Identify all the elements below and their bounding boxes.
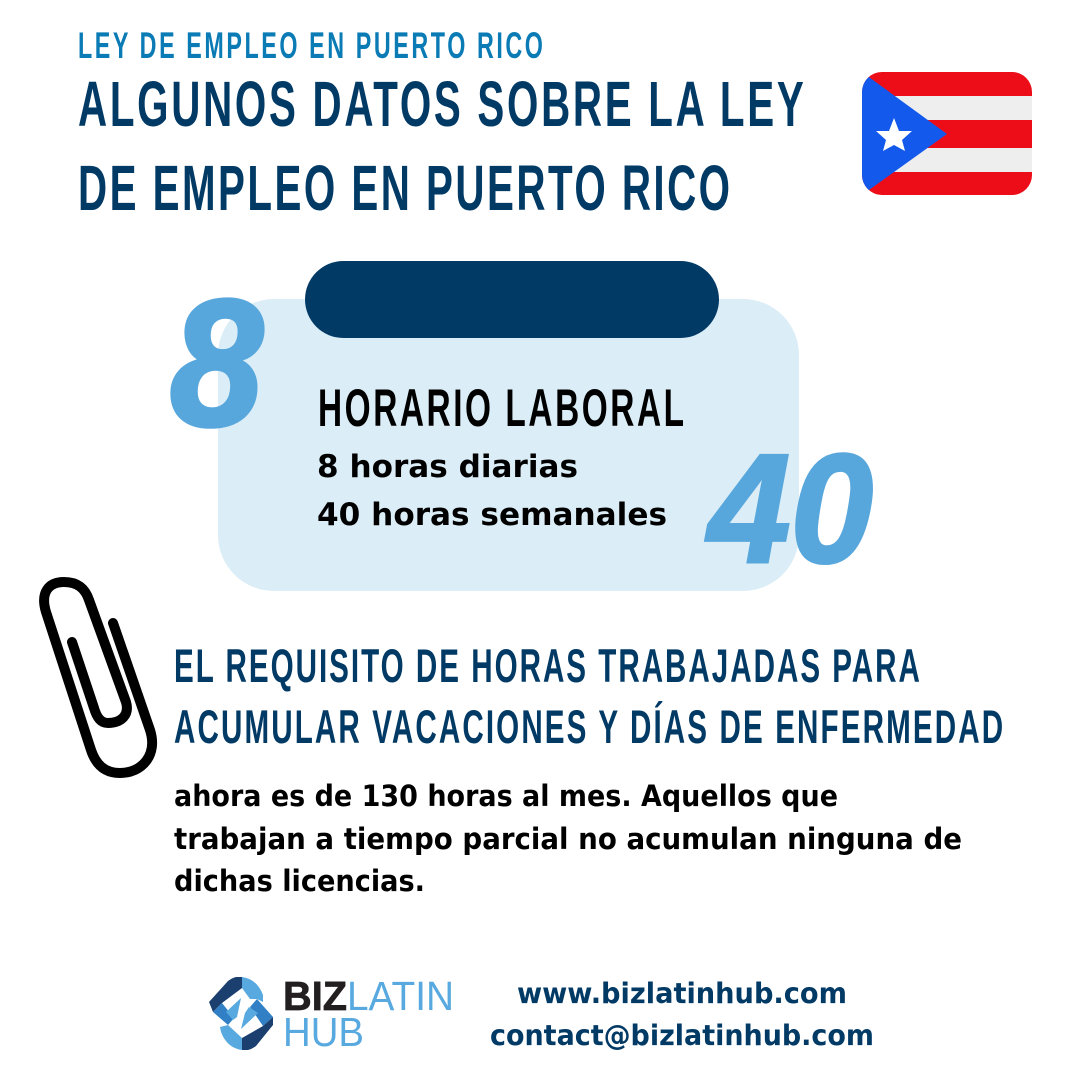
body paragraph: ahora es de 130 horas al mes. Aquellos que (174, 779, 838, 813)
body paragraph: dichas licencias. (174, 864, 425, 898)
eyebrow heading: LEY DE EMPLEO EN PUERTO RICO (78, 24, 543, 66)
contact details: contact@bizlatinhub.com (490, 1019, 874, 1052)
section heading: ACUMULAR VACACIONES Y DÍAS DE ENFERMEDAD (174, 701, 1003, 754)
contact details (490, 977, 874, 1052)
logo wordmark: BIZ (283, 973, 347, 1019)
logo mark (209, 977, 273, 1050)
number 40: 40 (705, 422, 873, 595)
body paragraph (174, 779, 962, 898)
body paragraph: trabajan a tiempo parcial no acumulan ninguna de (174, 822, 962, 856)
panel body text: 8 horas diarias (317, 449, 578, 485)
title: DE EMPLEO EN PUERTO RICO (78, 154, 730, 224)
number 8: 8 (170, 263, 263, 464)
title: ALGUNOS DATOS SOBRE LA LEY (78, 70, 804, 140)
panel body text: 40 horas semanales (317, 497, 667, 533)
logo: Biz Latin Hub: LATIN (347, 973, 454, 1019)
panel background (218, 299, 799, 591)
panel heading: HORARIO LABORAL (318, 379, 684, 438)
panel: horario laboral (170, 261, 873, 595)
logo: Biz Latin Hub (209, 973, 454, 1055)
contact details: www.bizlatinhub.com (517, 977, 847, 1010)
dark header pill (305, 261, 719, 338)
panel body text (317, 449, 667, 533)
section heading: EL REQUISITO DE HORAS TRABAJADAS PARA (174, 640, 920, 693)
logo: Biz Latin Hub: HUB (283, 1009, 364, 1055)
icon: paperclip (44, 582, 152, 773)
title (78, 70, 804, 224)
icon: Puerto Rico flag (862, 72, 1032, 195)
section heading (174, 640, 1003, 754)
